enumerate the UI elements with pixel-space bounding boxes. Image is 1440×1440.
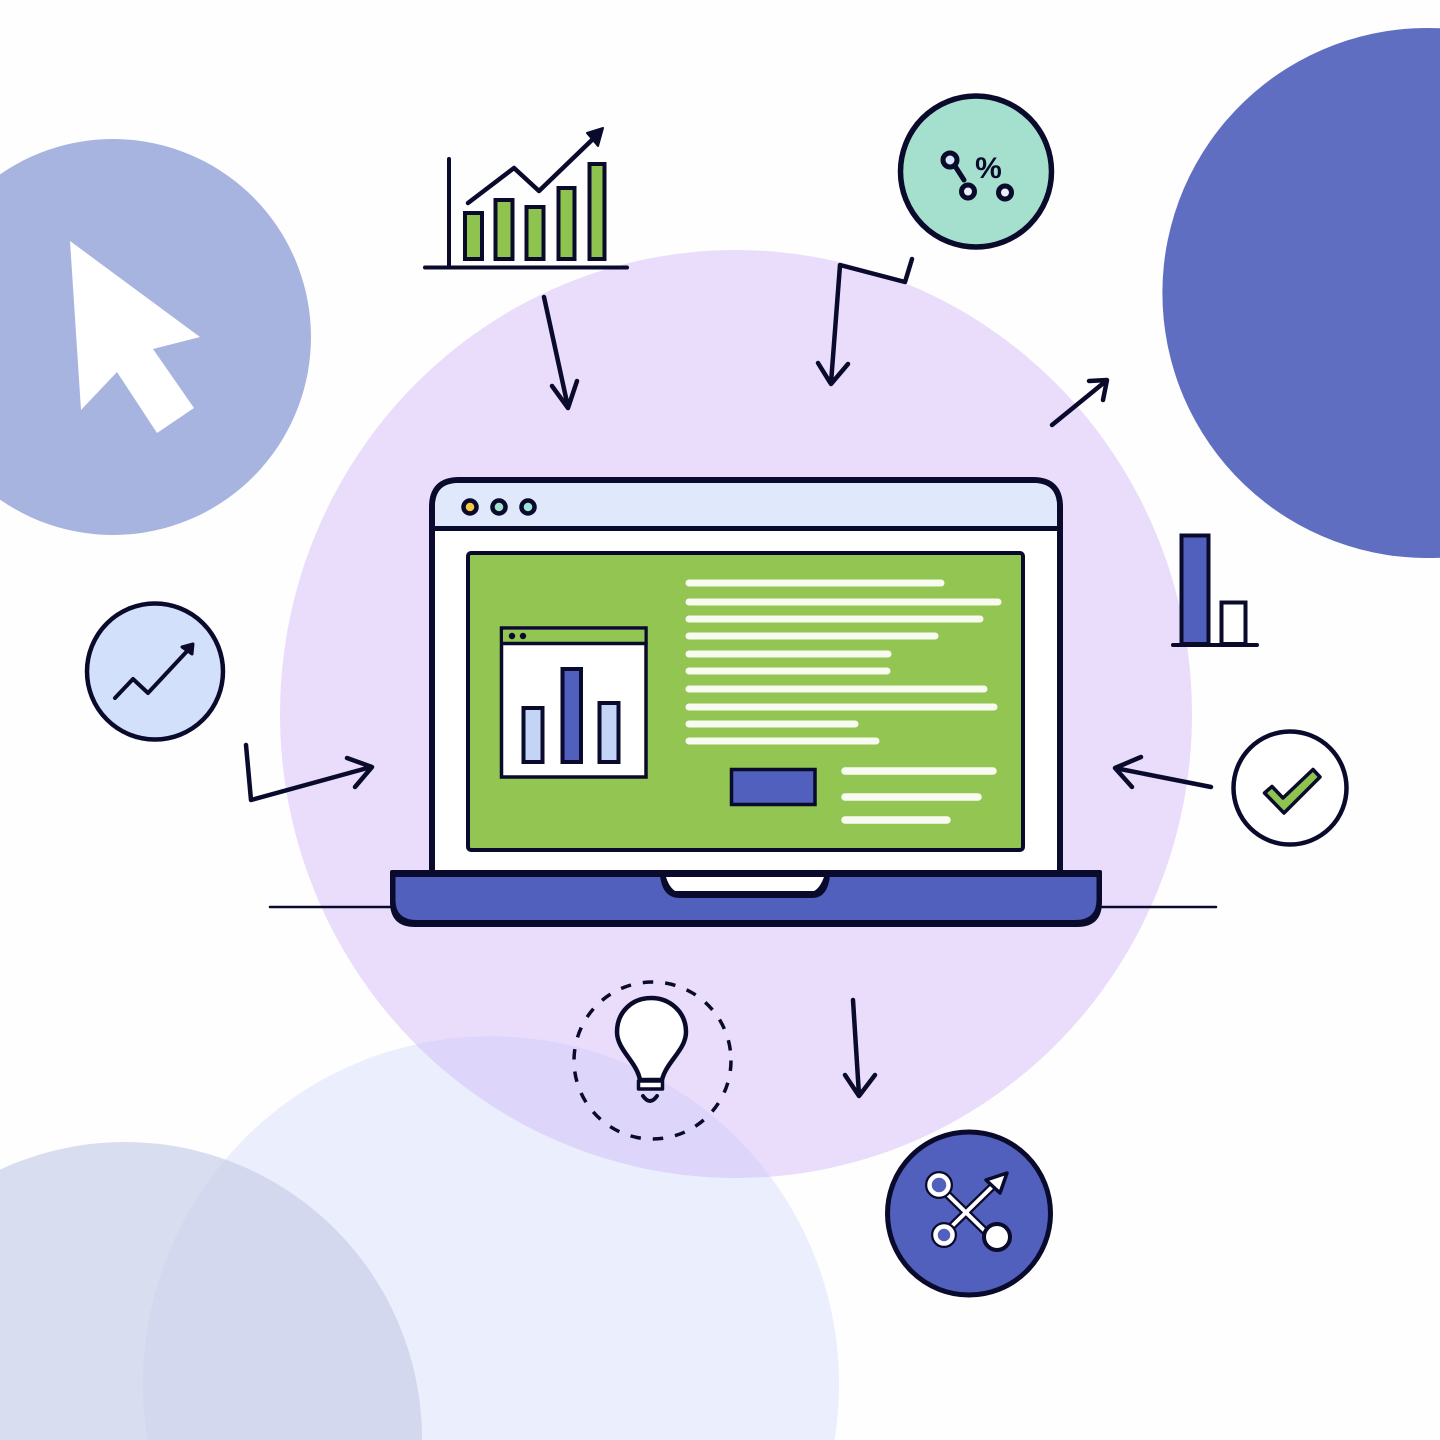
green content panel [468,553,1023,850]
trend arrow [468,128,603,203]
background circle: central lilac [280,250,1192,1178]
arrow: outward top right [1052,380,1107,425]
laptop base [390,870,1102,927]
background circle: top left periwinkle [0,139,311,535]
icon: crossing network badge [888,1132,1050,1295]
icon: trend line badge [87,604,223,740]
background circle: bottom pale blue [143,1036,839,1440]
icon: growth bar chart [425,128,627,268]
chart bars [465,164,604,259]
mini bars [524,669,618,762]
icon: check mark badge [1234,732,1346,844]
arrow: percent badge to laptop [818,259,912,384]
arrow: chart to laptop [544,297,577,408]
mini chart window [502,628,646,777]
background circle: bottom left grey-blue [0,1142,422,1440]
action button [732,770,815,804]
arrow: check icon to laptop [1115,757,1211,787]
arrow: downward to network badge [845,1000,875,1096]
laptop screen frame [432,480,1060,874]
icon: percent network badge [900,96,1052,247]
desk line [270,906,1216,908]
laptop [390,480,1102,927]
bulb glass [617,998,686,1080]
bulb base [638,1081,662,1089]
arrow: left trend icon to laptop [246,745,372,800]
icon: small bar chart [1173,536,1257,645]
window control dots [464,500,534,514]
icon: mouse cursor [70,241,200,433]
text placeholder lines [689,583,998,820]
chart axes [425,159,627,268]
icon: light bulb [574,982,731,1139]
browser title bar [435,483,1057,526]
laptop notch [660,875,830,898]
dashed halo [574,982,731,1139]
percent sign: % [975,152,1002,185]
background circle: top right indigo [1162,28,1440,558]
